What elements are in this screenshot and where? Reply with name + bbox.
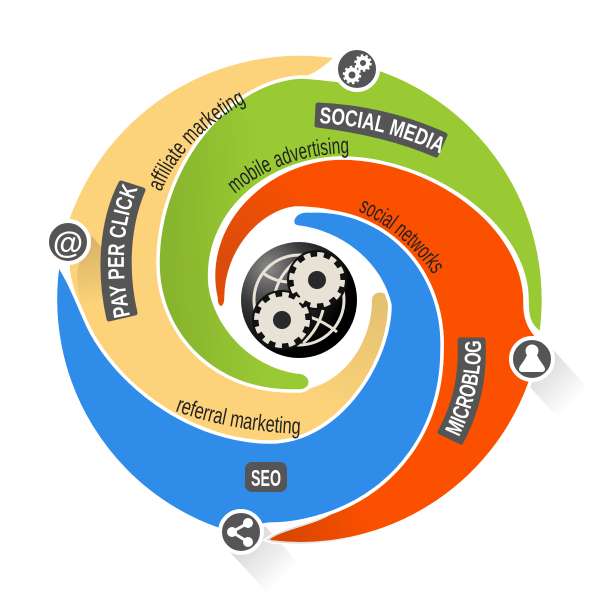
label: social media: SOCIAL MEDIA xyxy=(320,107,443,154)
label: seo: SEO xyxy=(251,465,281,491)
label: seo xyxy=(245,462,287,492)
label: pay per click: PAY PER CLICK xyxy=(108,183,138,318)
shadow: share icon xyxy=(226,518,300,595)
swirl: social media (green) xyxy=(158,65,543,391)
text: referral marketing: referral marketing xyxy=(176,400,300,438)
swirl: pay per click (yellow) xyxy=(70,56,388,442)
label: microblog: MICROBLOG xyxy=(445,341,482,436)
swirl: microblog (orange) xyxy=(214,158,545,544)
text: mobile advertising: mobile advertising xyxy=(228,138,348,194)
swirl: seo (blue) xyxy=(55,211,442,531)
text: social networks xyxy=(359,201,442,274)
icon: central globe with gears xyxy=(241,242,357,358)
icon: share xyxy=(220,511,262,553)
icon: person xyxy=(511,338,553,380)
text: affiliate marketing: affiliate marketing xyxy=(151,92,246,190)
shadow: at icon on yellow xyxy=(77,236,110,306)
text: social networks: social networks xyxy=(359,201,442,274)
shadow: person icon xyxy=(516,342,590,420)
icon: at sign: @ xyxy=(53,225,83,260)
icon: gears xyxy=(336,48,378,90)
shade: orange tail xyxy=(266,350,530,544)
icon: at sign xyxy=(47,221,89,263)
